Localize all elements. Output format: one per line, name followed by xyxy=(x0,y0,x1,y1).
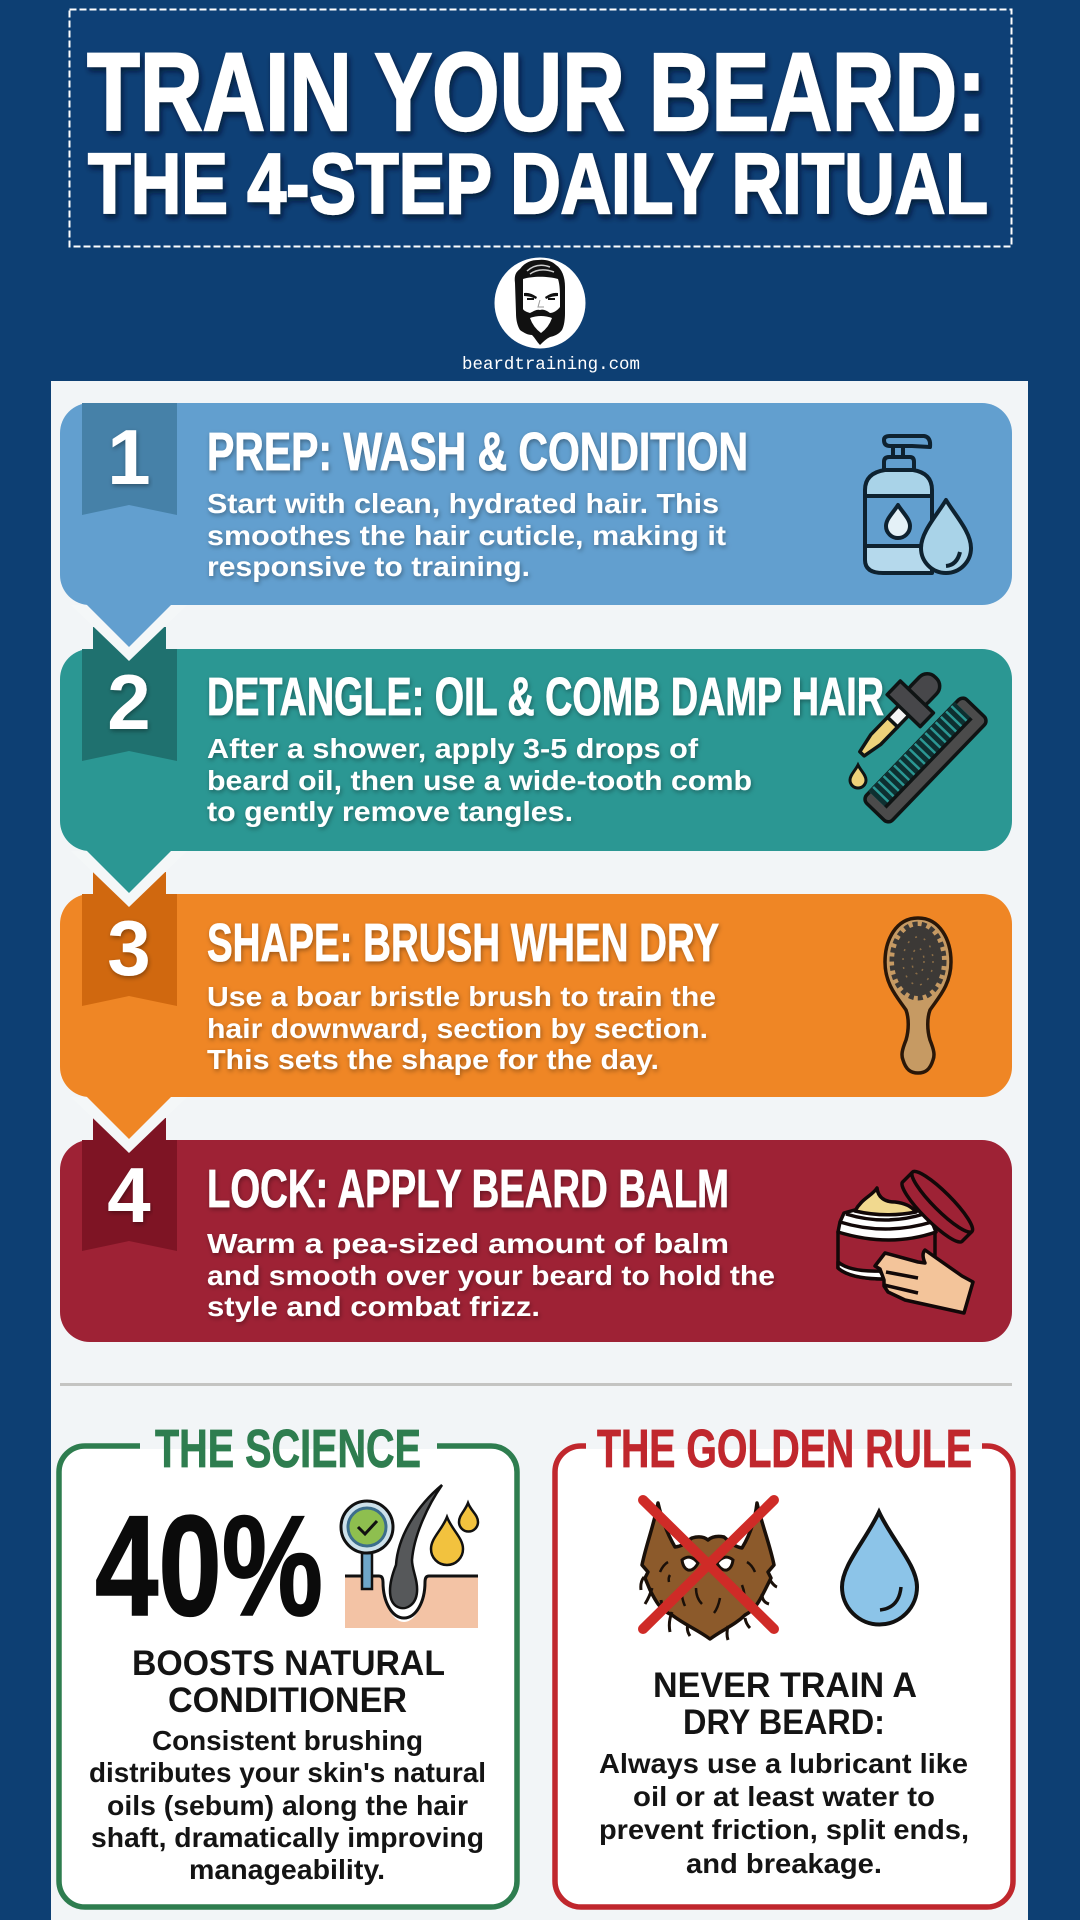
ribbon number 2 xyxy=(82,627,177,761)
golden rule description: oil or at least water to xyxy=(633,1781,935,1812)
step 1 heading: PREP: WASH & CONDITION xyxy=(207,422,748,482)
science description: Consistent brushing xyxy=(152,1725,423,1756)
panel: the golden rule xyxy=(555,1419,1013,1907)
science heading: THE SCIENCE xyxy=(155,1419,421,1479)
panel: the science xyxy=(59,1419,517,1907)
golden rule description xyxy=(599,1748,969,1879)
step 4 description xyxy=(207,1228,775,1322)
step 3 description: This sets the shape for the day. xyxy=(207,1044,659,1075)
ribbon number 2: 2 xyxy=(107,658,151,746)
golden rule subheading xyxy=(653,1666,917,1742)
ribbon number 4: 4 xyxy=(107,1151,151,1239)
step 2 description: beard oil, then use a wide-tooth comb xyxy=(207,765,752,796)
science subheading: CONDITIONER xyxy=(168,1681,407,1720)
science description: shaft, dramatically improving xyxy=(91,1822,484,1853)
step 1 description xyxy=(207,488,726,582)
icon: balm jar and hand xyxy=(838,1166,978,1313)
step 1: prep xyxy=(60,403,1012,605)
logo: bearded man xyxy=(494,258,586,348)
step 4 heading: LOCK: APPLY BEARD BALM xyxy=(207,1159,729,1219)
icon: hair follicle, magnifier and oil drops xyxy=(341,1485,478,1628)
icon: oil drop xyxy=(850,765,866,788)
step 1 description: smoothes the hair cuticle, making it xyxy=(207,520,726,551)
icon: comb xyxy=(862,695,988,824)
ribbon number 1: 1 xyxy=(107,413,151,501)
golden rule description: prevent friction, split ends, xyxy=(599,1814,969,1845)
step 4 description: and smooth over your beard to hold the xyxy=(207,1260,775,1291)
arrow: step 2 to 3 xyxy=(71,849,187,907)
ribbon number 1 xyxy=(82,403,177,515)
science description: oils (sebum) along the hair xyxy=(107,1790,468,1821)
icon: oil dropper xyxy=(845,662,952,770)
arrow: step 3 to 4 xyxy=(71,1095,187,1153)
main white panel xyxy=(51,381,1028,1920)
science description xyxy=(89,1725,486,1885)
arrow: step 1 to 2 xyxy=(71,603,187,661)
science subheading xyxy=(132,1644,445,1720)
step 1 description: Start with clean, hydrated hair. This xyxy=(207,488,719,519)
icon: water drop xyxy=(842,1512,917,1624)
header title block xyxy=(70,10,1012,246)
golden rule description: and breakage. xyxy=(686,1848,882,1879)
icon: crossed-out dry beard xyxy=(641,1500,777,1640)
golden rule subheading: DRY BEARD: xyxy=(683,1703,885,1742)
step 3: shape xyxy=(60,872,1012,1097)
icon: boar bristle brush xyxy=(885,918,951,1073)
golden rule description: Always use a lubricant like xyxy=(599,1748,968,1779)
step 2 description: to gently remove tangles. xyxy=(207,796,573,827)
ribbon number 3 xyxy=(82,872,177,1006)
step 3 heading: SHAPE: BRUSH WHEN DRY xyxy=(207,913,719,973)
statistic: 40%: 40% xyxy=(95,1487,323,1646)
science subheading: BOOSTS NATURAL xyxy=(132,1644,445,1683)
step 2 description: After a shower, apply 3-5 drops of xyxy=(207,733,699,764)
step 1 description: responsive to training. xyxy=(207,551,530,582)
step 3 description xyxy=(207,981,716,1075)
step 3 description: hair downward, section by section. xyxy=(207,1013,708,1044)
step 2: detangle xyxy=(60,627,1012,851)
step 3 description: Use a boar bristle brush to train the xyxy=(207,981,716,1012)
website label: beardtraining.com xyxy=(462,355,640,375)
golden rule subheading: NEVER TRAIN A xyxy=(653,1666,917,1705)
step 4: lock xyxy=(60,1118,1012,1342)
ribbon number 3: 3 xyxy=(107,904,151,992)
science description: distributes your skin's natural xyxy=(89,1757,486,1788)
step 4 description: Warm a pea-sized amount of balm xyxy=(207,1228,729,1259)
step 2 description xyxy=(207,733,752,827)
step 4 description: style and combat frizz. xyxy=(207,1291,540,1322)
science description: manageability. xyxy=(189,1854,385,1885)
icon: pump bottle and water drop xyxy=(865,436,971,573)
ribbon number 4 xyxy=(82,1118,177,1251)
